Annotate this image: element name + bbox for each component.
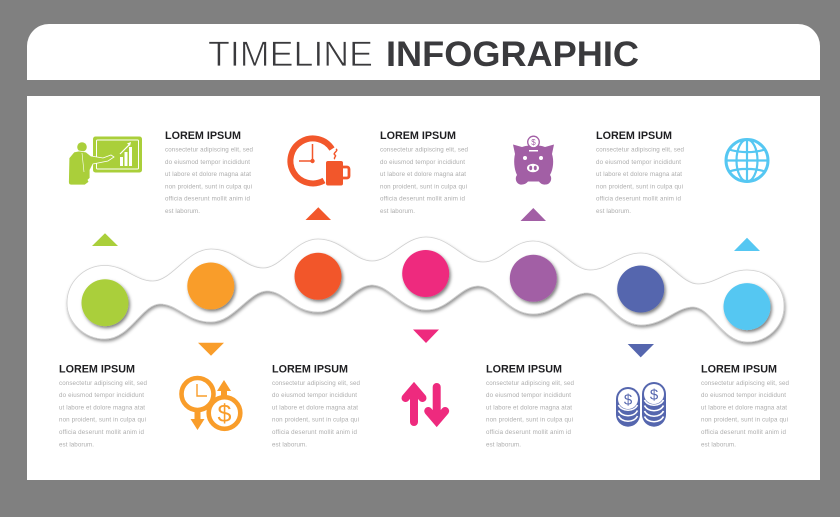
text block: top 2: consectetur adipiscing elit, sed bbox=[380, 146, 469, 154]
text block: bottom 1: do eiusmod tempor incididunt bbox=[59, 392, 144, 399]
text block: bottom 1: consectetur adipiscing elit, sed bbox=[59, 380, 148, 387]
text block: bottom 1: est laborum. bbox=[59, 441, 94, 448]
text block: bottom 4: ut labore et dolore magna atat bbox=[701, 404, 787, 411]
icon: piggy bank: $ bbox=[531, 138, 536, 147]
text block: bottom 3: do eiusmod tempor incididunt bbox=[486, 392, 571, 399]
text block: top 3 bbox=[596, 130, 685, 215]
text block: bottom 3: est laborum. bbox=[486, 441, 521, 448]
text block: bottom 2: do eiusmod tempor incididunt bbox=[272, 392, 357, 399]
text block: top 1: do eiusmod tempor incididunt bbox=[165, 159, 250, 166]
timeline node: pink bbox=[402, 250, 449, 297]
text block: top 2: LOREM IPSUM bbox=[380, 130, 456, 142]
icon: clock with coffee cup bbox=[290, 138, 349, 186]
icon: piggy bank bbox=[513, 136, 554, 185]
text block: bottom 4: do eiusmod tempor incididunt bbox=[701, 392, 786, 399]
timeline node: orange bbox=[187, 262, 234, 310]
icon: coin stacks: $ bbox=[650, 386, 659, 404]
text block: bottom 3: consectetur adipiscing elit, sed bbox=[486, 380, 575, 387]
text block: top 2: ut labore et dolore magna atat bbox=[380, 171, 466, 178]
text block: bottom 3: ut labore et dolore magna atat bbox=[486, 404, 572, 411]
icon: clock and dollar with arrows: $ bbox=[218, 400, 232, 428]
title: INFOGRAPHIC bbox=[386, 35, 639, 74]
arrow: cyan up bbox=[734, 238, 760, 251]
arrow: green up bbox=[92, 233, 118, 246]
title bbox=[208, 35, 639, 74]
icon: coin stacks: $ bbox=[624, 392, 633, 408]
title: TIMELINE bbox=[208, 35, 373, 74]
text block: bottom 2: LOREM IPSUM bbox=[272, 364, 348, 376]
text block: bottom 3: non proident, sunt in culpa qui bbox=[486, 417, 573, 424]
text block: top 3: consectetur adipiscing elit, sed bbox=[596, 146, 685, 154]
text block: top 3: ut labore et dolore magna atat bbox=[596, 171, 682, 178]
text block: bottom 1: LOREM IPSUM bbox=[59, 364, 135, 376]
timeline node: cyan bbox=[724, 283, 770, 330]
text block: bottom 1: non proident, sunt in culpa qui bbox=[59, 417, 146, 424]
text block: top 2: officia deserunt mollit anim id bbox=[380, 196, 466, 203]
text block: top 3: do eiusmod tempor incididunt bbox=[596, 159, 681, 166]
timeline node: blue bbox=[617, 266, 664, 312]
text block: bottom 4: non proident, sunt in culpa qui bbox=[701, 417, 788, 424]
text block: bottom 1: officia deserunt mollit anim id bbox=[59, 429, 145, 436]
icon: globe bbox=[726, 140, 768, 182]
text block: top 1: officia deserunt mollit anim id bbox=[165, 196, 251, 203]
icon: presenter with chart bbox=[68, 136, 142, 185]
timeline node: red bbox=[294, 253, 342, 300]
text block: bottom 2: ut labore et dolore magna atat bbox=[272, 404, 358, 411]
timeline node: purple bbox=[510, 255, 557, 302]
text block: bottom 2: officia deserunt mollit anim id bbox=[272, 429, 358, 436]
text block: bottom 4 bbox=[701, 364, 790, 448]
text block: top 2: do eiusmod tempor incididunt bbox=[380, 159, 465, 166]
text block: top 3: LOREM IPSUM bbox=[596, 130, 672, 142]
header panel bbox=[27, 24, 820, 80]
text block: top 1: LOREM IPSUM bbox=[165, 130, 241, 142]
arrow: orange down bbox=[198, 343, 224, 356]
text block: bottom 2 bbox=[272, 364, 361, 448]
icon: clock and dollar with arrows bbox=[182, 378, 240, 430]
text block: bottom 3 bbox=[486, 364, 575, 448]
text block: bottom 4: officia deserunt mollit anim id bbox=[701, 429, 787, 436]
timeline ribbon bbox=[67, 237, 784, 342]
text block: top 2 bbox=[380, 130, 469, 215]
text block: top 3: officia deserunt mollit anim id bbox=[596, 196, 682, 203]
text block: bottom 4: consectetur adipiscing elit, sed bbox=[701, 380, 790, 387]
text block: top 1 bbox=[165, 130, 254, 215]
text block: bottom 2: non proident, sunt in culpa qui bbox=[272, 417, 359, 424]
text block: bottom 2: consectetur adipiscing elit, sed bbox=[272, 380, 361, 387]
arrow: blue down bbox=[628, 344, 654, 357]
arrow: pink down bbox=[413, 330, 439, 343]
text block: top 1: ut labore et dolore magna atat bbox=[165, 171, 251, 178]
text block: bottom 1 bbox=[59, 364, 148, 448]
icon: up and down arrows bbox=[406, 387, 445, 422]
text block: bottom 1: ut labore et dolore magna atat bbox=[59, 404, 145, 411]
text block: top 3: non proident, sunt in culpa qui bbox=[596, 183, 683, 190]
timeline node: green bbox=[82, 279, 128, 326]
text block: bottom 4: est laborum. bbox=[701, 441, 736, 448]
icon: coin stacks bbox=[616, 382, 666, 427]
text block: top 3: est laborum. bbox=[596, 208, 631, 215]
text block: top 2: non proident, sunt in culpa qui bbox=[380, 183, 467, 190]
text block: top 1: consectetur adipiscing elit, sed bbox=[165, 146, 254, 154]
text block: top 1: non proident, sunt in culpa qui bbox=[165, 183, 252, 190]
text block: bottom 3: officia deserunt mollit anim id bbox=[486, 429, 572, 436]
text block: top 1: est laborum. bbox=[165, 208, 200, 215]
text block: top 2: est laborum. bbox=[380, 208, 415, 215]
text block: bottom 3: LOREM IPSUM bbox=[486, 364, 562, 376]
arrow: purple up bbox=[520, 208, 546, 221]
arrow: red up bbox=[306, 207, 331, 220]
main panel bbox=[27, 96, 820, 480]
text block: bottom 4: LOREM IPSUM bbox=[701, 364, 777, 376]
text block: bottom 2: est laborum. bbox=[272, 441, 307, 448]
